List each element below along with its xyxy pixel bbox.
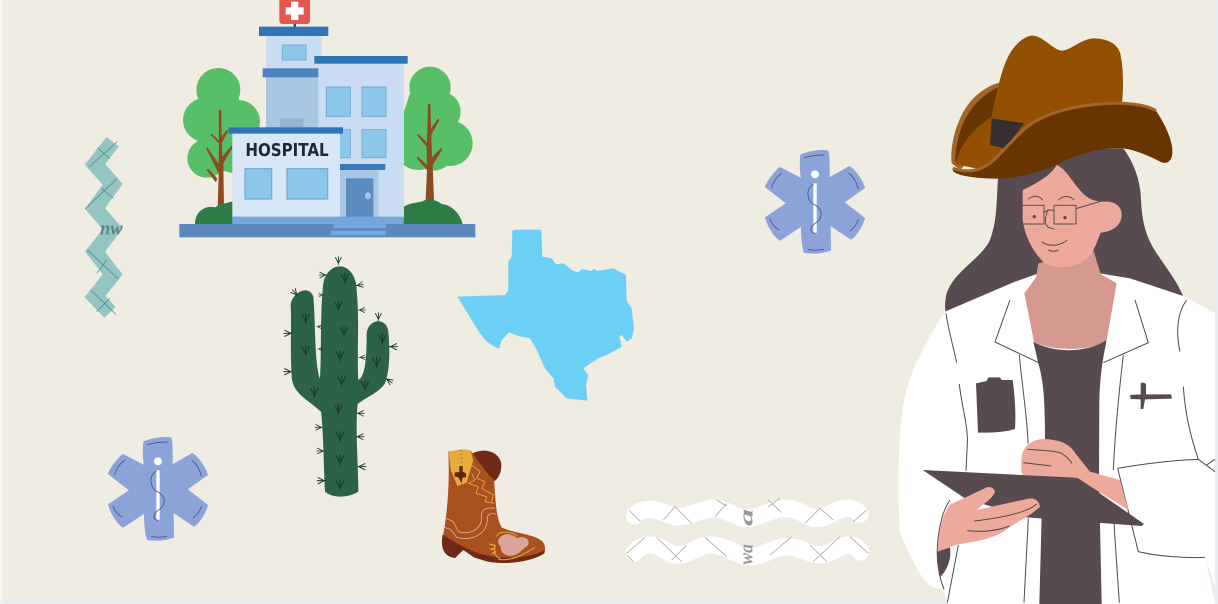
texas map bbox=[457, 230, 634, 401]
star of life: lower bbox=[109, 438, 207, 540]
zigzag ribbon bbox=[85, 142, 123, 314]
cuff shadow bbox=[937, 547, 950, 577]
right wing bbox=[314, 56, 408, 217]
base and steps bbox=[179, 217, 475, 237]
pocket clipboard bbox=[976, 377, 1015, 433]
smile bbox=[1042, 240, 1067, 251]
shirt bbox=[1033, 340, 1107, 604]
lower hand bbox=[938, 487, 1040, 552]
hat brim highlight bbox=[953, 103, 1156, 171]
tablet bbox=[923, 470, 1144, 526]
star of life: upper bbox=[766, 151, 864, 253]
script text on lower ribbon: wa bbox=[737, 544, 758, 565]
left tree bbox=[183, 68, 260, 224]
script text on ribbon: nw bbox=[100, 218, 123, 239]
pocket pen cross bbox=[1130, 383, 1172, 409]
neck bbox=[1024, 250, 1117, 349]
upper hand and forearm bbox=[1021, 439, 1128, 510]
cactus body bbox=[291, 266, 389, 497]
front block bbox=[229, 127, 343, 217]
face bbox=[1022, 165, 1122, 267]
white coat bbox=[899, 273, 1215, 604]
saguaro cactus bbox=[284, 257, 397, 497]
cactus spines bbox=[284, 257, 397, 490]
doctor with cowboy hat bbox=[899, 36, 1215, 604]
coat details bbox=[923, 300, 1215, 604]
tower bbox=[259, 27, 328, 128]
hospital label: HOSPITAL bbox=[245, 141, 329, 161]
hospital illustration bbox=[179, 0, 475, 237]
wavy ribbons bbox=[627, 498, 868, 565]
cowboy boot bbox=[442, 449, 545, 563]
cowboy hat bbox=[951, 36, 1172, 179]
eyes and eyebrows bbox=[1028, 196, 1074, 219]
glasses bbox=[1022, 201, 1102, 229]
hat brim bbox=[953, 103, 1172, 179]
rooftop cross sign bbox=[279, 0, 310, 27]
right tree bbox=[395, 67, 473, 224]
coat seams bbox=[937, 300, 1215, 603]
script text on upper ribbon: a bbox=[737, 508, 758, 526]
hair bbox=[945, 148, 1187, 313]
